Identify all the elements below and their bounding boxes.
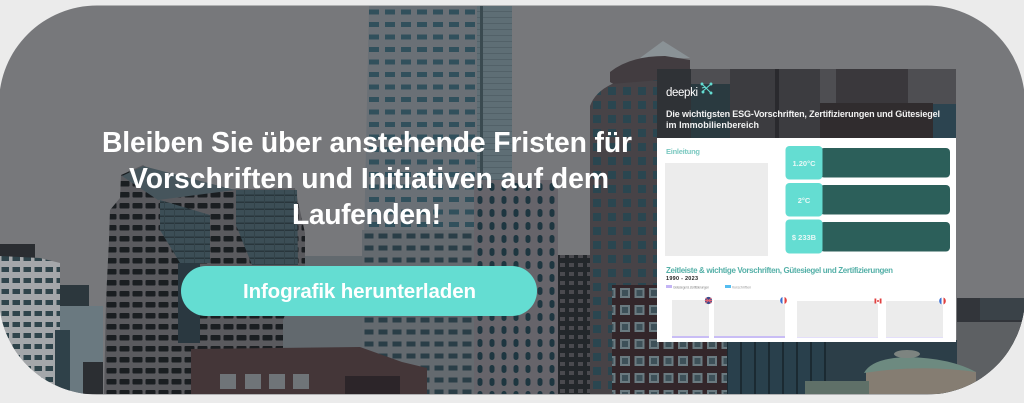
stat bar: 2°C (786, 183, 950, 216)
intro placeholder (665, 163, 768, 256)
stat bar: 1.20°C (786, 146, 950, 180)
preview body (657, 138, 956, 342)
building: right skyline (826, 298, 1024, 394)
preview title: im Immobilienbereich (666, 120, 759, 130)
building: cylindrical tower (362, 6, 512, 394)
building: light block behind, right of tower (283, 256, 365, 351)
timeline card 2 (714, 297, 787, 338)
logo: deepki (666, 83, 712, 99)
building: blue glass block (727, 340, 827, 394)
headline: Bleiben Sie über anstehende Fristen für (102, 126, 632, 158)
legend: Gütesiegel & Zertifizierungen (673, 286, 709, 290)
section heading: Einleitung: Einleitung (666, 147, 700, 156)
icon: Canadian flag (874, 298, 882, 304)
legend (666, 285, 751, 290)
headline: Laufenden! (292, 198, 441, 230)
timeline card 4 (886, 297, 946, 338)
timeline card 1 (672, 297, 712, 338)
icon: logo star (701, 83, 712, 94)
stat bar: $ 233B: $ 233B (792, 233, 817, 242)
stat bar: 1.20°C: 1.20°C (792, 159, 816, 168)
button: download: Infografik herunterladen (243, 280, 476, 303)
preview header (657, 69, 956, 138)
stat bar: $ 233B (786, 220, 950, 254)
logo: deepki: deepki (666, 87, 698, 99)
building: white office, left (0, 244, 60, 394)
timeline heading: Zeitleiste & wichtige Vorschriften, Gütesiegel und Zertifizierungen (666, 266, 893, 275)
timeline card 3 (797, 298, 882, 338)
building: domed roof (805, 350, 976, 394)
headline (102, 126, 632, 230)
infographic preview (657, 69, 956, 342)
preview title: Die wichtigsten ESG-Vorschriften, Zertifizierungen und Gütesiegel (666, 109, 940, 119)
building: dark mid block (558, 255, 592, 394)
icon: French flag (939, 297, 946, 305)
legend: Vorschriften (732, 286, 751, 290)
icon: French flag (780, 297, 787, 304)
building: glass, left (55, 285, 103, 394)
button: download (181, 266, 537, 316)
stat bar: 2°C: 2°C (798, 196, 811, 205)
preview title (666, 109, 940, 130)
building: arched window facade (474, 180, 558, 394)
icon: UK flag (705, 297, 712, 304)
building: brick block lower centre (612, 285, 727, 394)
timeline years: 1990 - 2023 (666, 276, 698, 282)
headline: Vorschriften und Initiativen auf dem (129, 162, 609, 194)
building: brick low-rise (191, 347, 427, 394)
building: round tower with pyramid roof (590, 41, 690, 394)
building: large stepped tower (104, 165, 305, 394)
